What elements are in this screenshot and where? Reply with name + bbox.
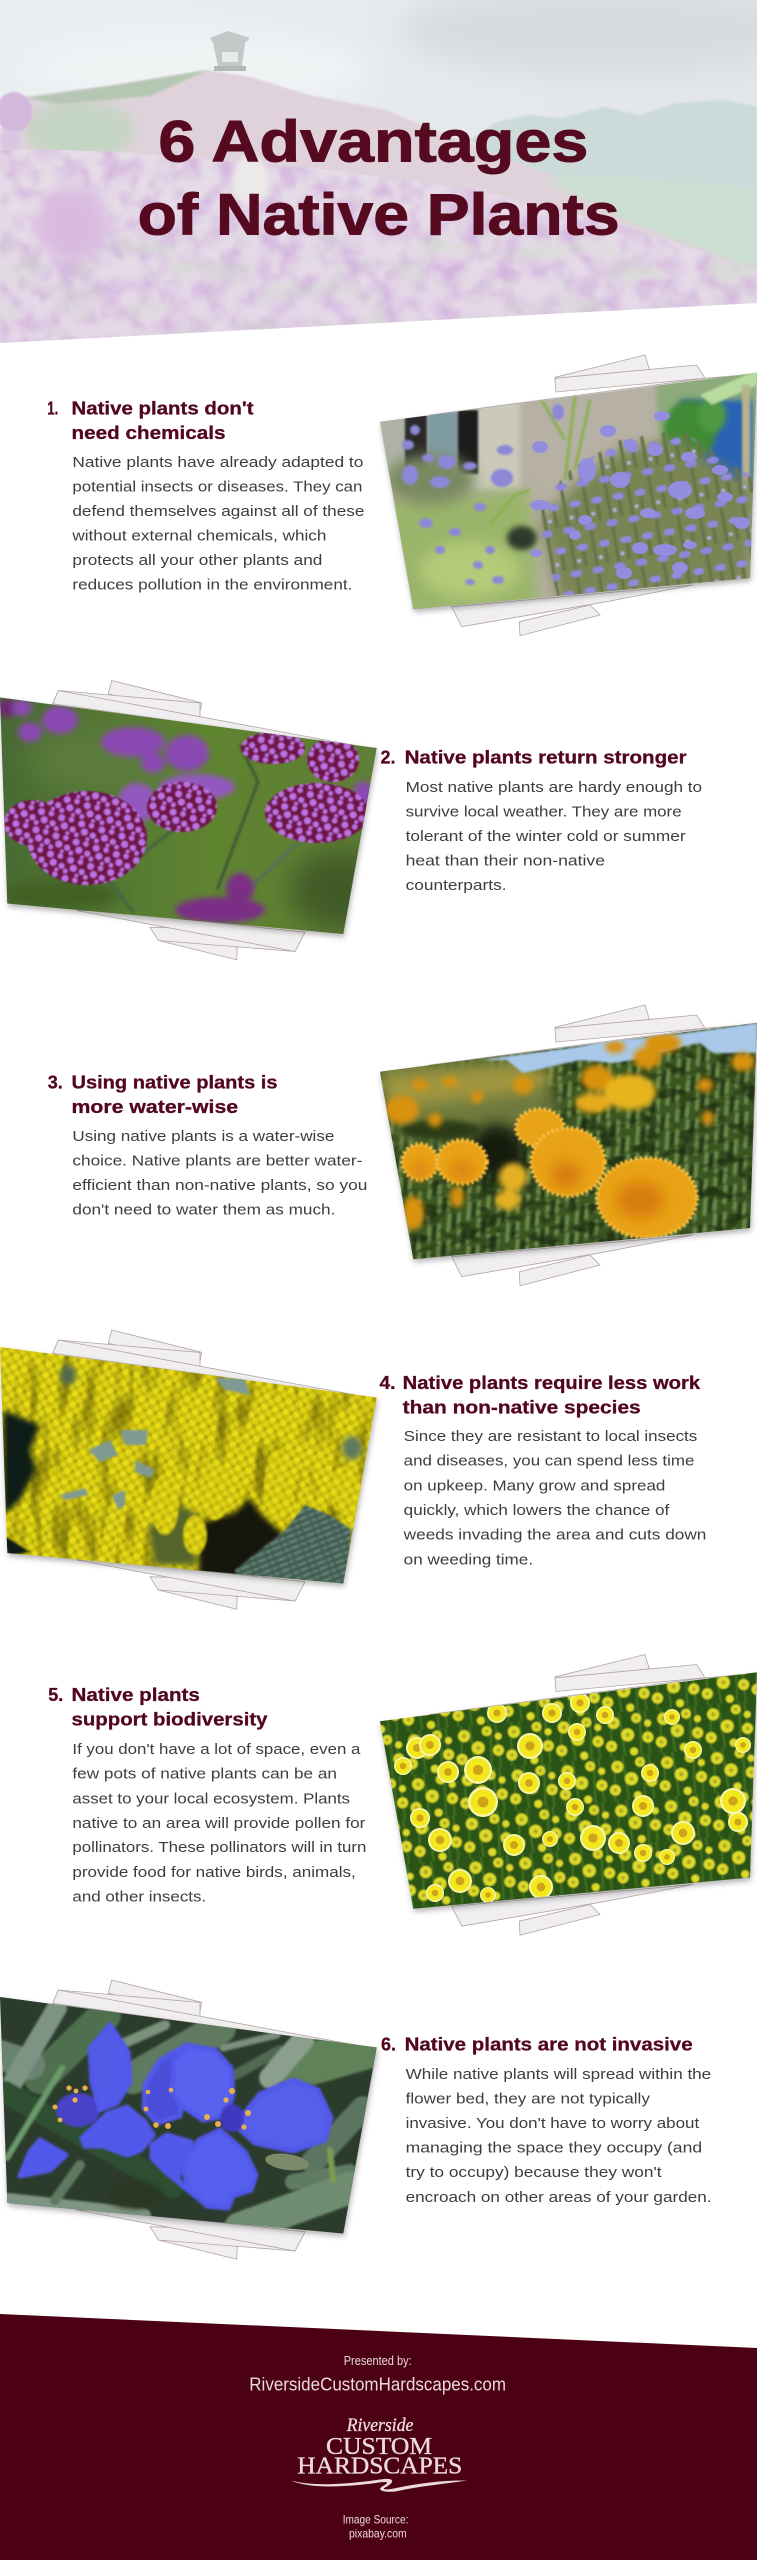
image source credit: Image Source: — [343, 2512, 408, 2526]
body text 4: Since they are resistant to local insects — [404, 1429, 697, 1445]
photo 3: orange pincushion flowers with paper backing — [375, 1005, 757, 1286]
body text 2: tolerant of the winter cold or summer — [406, 829, 686, 845]
body text 2: Most native plants are hardy enough to — [406, 780, 702, 796]
image source credit — [343, 2512, 408, 2540]
body text 5 — [72, 1742, 366, 1906]
body text 6: try to occupy) because they won't — [406, 2165, 662, 2181]
body text 1 — [71, 455, 364, 593]
body text 1: Native plants have already adapted to — [72, 455, 363, 471]
heading 1: 1. — [47, 397, 58, 418]
heading 6: Native plants are not invasive — [405, 2034, 693, 2055]
body text 5: and other insects. — [72, 1890, 206, 1906]
body text 6 — [406, 2067, 712, 2206]
header banner — [0, 0, 757, 345]
heading 6: 6. — [381, 2034, 396, 2055]
photo 2: purple verbena with paper backing — [0, 680, 390, 960]
body text 5: pollinators. These pollinators will in turn — [72, 1840, 366, 1856]
heading 4: 4. — [380, 1372, 396, 1393]
body text 6: encroach on other areas of your garden. — [406, 2190, 712, 2206]
heading 4: Native plants require less work — [403, 1372, 701, 1393]
body text 6: While native plants will spread within the — [406, 2067, 711, 2083]
footer band — [0, 2314, 757, 2560]
heading 5: Native plants — [72, 1684, 200, 1705]
title: of Native Plants — [138, 182, 620, 247]
website url: RiversideCustomHardscapes.com — [249, 2375, 506, 2395]
body text 3 — [72, 1129, 367, 1219]
icon: hilltop tower — [210, 31, 250, 71]
logo: Riverside Custom Hardscapes: HARDSCAPES — [297, 2453, 462, 2479]
body text 4: on weeding time. — [404, 1552, 533, 1568]
panel: advantage 2 — [0, 680, 702, 960]
logo: Riverside Custom Hardscapes: CUSTOM — [326, 2434, 432, 2460]
body text 2: counterparts. — [406, 878, 507, 894]
heading 5 — [48, 1684, 268, 1729]
logo: Riverside Custom Hardscapes: Riverside — [346, 2415, 413, 2436]
heading 1 — [47, 397, 253, 443]
panel: advantage 5 — [48, 1654, 757, 1935]
heading 3: Using native plants is — [72, 1072, 278, 1093]
logo: Riverside Custom Hardscapes — [291, 2415, 467, 2492]
panel: advantage 6 — [0, 1980, 712, 2259]
body text 5: asset to your local ecosystem. Plants — [72, 1791, 350, 1807]
photo 6: blue spiderwort with paper backing — [0, 1980, 380, 2259]
body text 1: reduces pollution in the environment. — [72, 577, 352, 593]
body text 6: flower bed, they are not typically — [406, 2092, 651, 2108]
body text 5: few pots of native plants can be an — [72, 1766, 337, 1782]
body text 6: invasive. You don't have to worry about — [406, 2116, 699, 2132]
panel: advantage 1 — [47, 355, 757, 636]
heading 5: 5. — [48, 1684, 63, 1705]
heading 4 — [380, 1372, 701, 1418]
heading 1: Native plants don't — [72, 397, 254, 418]
photo 1: lavender verbena with paper backing — [375, 355, 757, 636]
presented by text: Presented by: — [344, 2354, 412, 2368]
heading 2: 2. — [380, 747, 396, 768]
body text 3: choice. Native plants are better water- — [72, 1154, 363, 1170]
body text 5: If you don't have a lot of space, even a — [72, 1742, 361, 1758]
body text 2: heat than their non-native — [406, 854, 605, 870]
body text 5: native to an area will provide pollen for — [72, 1816, 366, 1832]
body text 1: potential insects or diseases. They can — [72, 479, 362, 495]
image source credit: pixabay.com — [349, 2526, 407, 2540]
body text 4: quickly, which lowers the chance of — [404, 1503, 670, 1519]
body text 1: without external chemicals, which — [71, 528, 326, 544]
photo 5: yellow tidy tips with paper backing — [375, 1654, 757, 1935]
body text 3: Using native plants is a water-wise — [72, 1129, 334, 1145]
body text 2: survive local weather. They are more — [406, 804, 682, 820]
heading 1: need chemicals — [72, 422, 225, 443]
heading 3: 3. — [48, 1072, 63, 1093]
heading 3 — [48, 1072, 277, 1117]
body text 4: on upkeep. Many grow and spread — [404, 1479, 665, 1495]
body text 4 — [403, 1429, 706, 1568]
heading 5: support biodiversity — [72, 1708, 268, 1729]
body text 5: provide food for native birds, animals, — [72, 1865, 356, 1881]
body text 6: managing the space they occupy (and — [406, 2141, 702, 2157]
body text 3: efficient than non-native plants, so you — [72, 1178, 367, 1194]
heading 4: than non-native species — [403, 1396, 641, 1418]
photo 4: yellow mimosa with paper backing — [0, 1330, 380, 1609]
body text 2 — [406, 780, 702, 894]
header photo: lavender field and hill — [0, 0, 757, 345]
body text 1: protects all your other plants and — [72, 553, 322, 569]
panel: advantage 3 — [48, 1005, 757, 1286]
title — [138, 109, 620, 247]
panel: advantage 4 — [0, 1330, 706, 1609]
body text 1: defend themselves against all of these — [72, 504, 364, 520]
body text 3: don't need to water them as much. — [72, 1203, 335, 1219]
heading 2: Native plants return stronger — [405, 747, 687, 768]
title: 6 Advantages — [158, 109, 588, 174]
body text 4: weeds invading the area and cuts down — [403, 1528, 706, 1544]
heading 3: more water-wise — [72, 1096, 238, 1117]
body text 4: and diseases, you can spend less time — [404, 1454, 694, 1470]
